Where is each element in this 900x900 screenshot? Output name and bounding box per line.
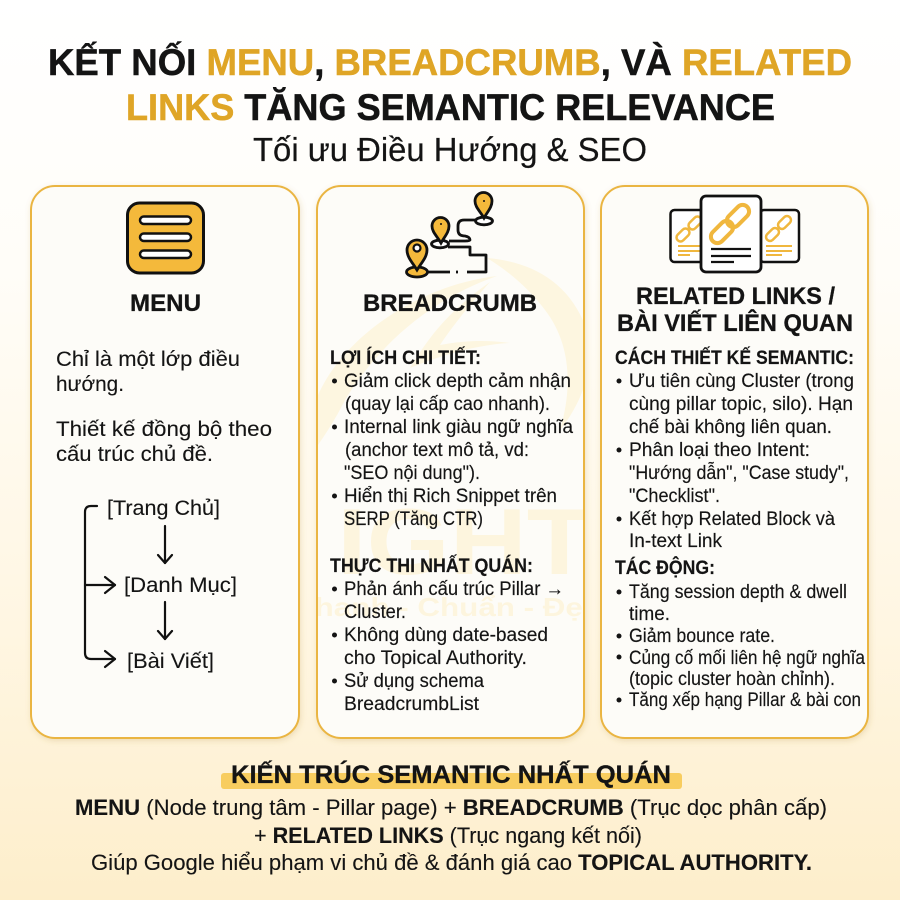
text block: impact: Củng cố mối liên hệ ngữ nghĩa xyxy=(629,648,865,669)
text block: impact: Giảm bounce rate. xyxy=(629,626,775,647)
footer summary text xyxy=(75,795,827,875)
hierarchy diagram: [Danh Mục] xyxy=(124,573,237,597)
text block: impact: Tăng session depth & dwell xyxy=(629,582,847,603)
text block: semantic design: chế bài không liên quan. xyxy=(629,417,832,438)
text block: menu description: hướng. xyxy=(56,372,124,396)
panel: menu xyxy=(31,186,299,738)
subtitle: Tối ưu Điều Hướng & SEO xyxy=(253,131,647,168)
text block: impact: Tăng xếp hạng Pillar & bài con xyxy=(629,690,861,711)
text block: semantic design: Ưu tiên cùng Cluster (trong xyxy=(629,371,854,392)
text block: consistent implementation: cho Topical Authority. xyxy=(344,648,527,669)
icon: breadcrumb route xyxy=(406,192,492,277)
panel: breadcrumb xyxy=(314,184,589,744)
text block: detailed benefits: "SEO nội dung"). xyxy=(344,463,480,484)
text block: consistent implementation: Cluster. xyxy=(344,602,406,623)
text block: detailed benefits: Giảm click depth cảm nhận xyxy=(344,371,571,392)
title: LINKS TĂNG SEMANTIC RELEVANCE xyxy=(126,87,775,128)
icon: menu xyxy=(128,203,204,273)
text block: consistent implementation: THỰC THI NHẤT QUÁN: xyxy=(330,555,533,577)
text block: menu description: Chỉ là một lớp điều xyxy=(56,347,240,371)
text block: detailed benefits: (anchor text mô tả, vd: xyxy=(345,440,529,461)
title: KẾT NỐI MENU, BREADCRUMB, VÀ RELATED xyxy=(48,41,852,83)
watermark: brand text: Nhanh - Chuẩn - Đẹp xyxy=(292,592,602,622)
text block: detailed benefits: Hiển thị Rich Snippet trên xyxy=(344,486,557,507)
text block: menu description: Thiết kế đồng bộ theo xyxy=(56,417,272,441)
text block: semantic design: "Checklist". xyxy=(629,486,720,507)
text block: impact: TÁC ĐỘNG: xyxy=(615,557,715,579)
text block: semantic design: In-text Link xyxy=(629,531,722,552)
footer heading with highlight: KIẾN TRÚC SEMANTIC NHẤT QUÁN xyxy=(231,759,671,789)
watermark: brand text xyxy=(318,508,583,620)
watermark: brand text: IGHT xyxy=(337,489,592,594)
heading: related links: BÀI VIẾT LIÊN QUAN xyxy=(617,309,853,337)
text block: semantic design: CÁCH THIẾT KẾ SEMANTIC: xyxy=(615,347,854,369)
hierarchy diagram xyxy=(85,496,237,673)
text block: semantic design: Phân loại theo Intent: xyxy=(629,440,810,461)
text block: impact: (topic cluster hoàn chỉnh). xyxy=(629,669,835,690)
text block: detailed benefits: (quay lại cấp cao nhanh). xyxy=(345,394,550,415)
text block: impact: time. xyxy=(629,604,670,625)
hierarchy diagram: [Trang Chủ] xyxy=(107,496,220,520)
text block: semantic design: cùng pillar topic, silo). Hạn xyxy=(629,394,853,415)
footer summary text: Giúp Google hiểu phạm vi chủ đề & đánh giá cao TOPICAL AUTHORITY. xyxy=(91,850,812,875)
watermark: swoosh logo xyxy=(318,258,590,445)
title xyxy=(48,41,852,128)
footer summary text: MENU (Node trung tâm - Pillar page) + BREADCRUMB (Trục dọc phân cấp) xyxy=(75,795,827,820)
text block: consistent implementation: Không dùng date-based xyxy=(344,625,548,646)
text block: semantic design: "Hướng dẫn", "Case study", xyxy=(629,462,849,484)
footer summary text: + RELATED LINKS (Trục ngang kết nối) xyxy=(254,823,642,848)
text block: consistent implementation: Sử dụng schema xyxy=(344,671,484,692)
hierarchy diagram: [Bài Viết] xyxy=(127,649,214,673)
text block: semantic design: Kết hợp Related Block và xyxy=(629,509,835,530)
heading: related links: RELATED LINKS / xyxy=(636,283,835,310)
text block: consistent implementation: Phản ánh cấu trúc Pillar → xyxy=(344,579,564,600)
text block: detailed benefits: SERP (Tăng CTR) xyxy=(344,509,483,530)
heading: breadcrumb: BREADCRUMB xyxy=(363,290,537,317)
text block: consistent implementation xyxy=(330,555,564,715)
text block: impact xyxy=(615,557,865,711)
panel: related links xyxy=(601,186,868,738)
heading: menu: MENU xyxy=(130,290,201,317)
text block: semantic design xyxy=(615,347,854,552)
text block: detailed benefits: LỢI ÍCH CHI TIẾT: xyxy=(330,347,481,369)
text block: detailed benefits xyxy=(330,347,573,530)
text block: menu description: cấu trúc chủ đề. xyxy=(56,442,213,466)
text block: menu description xyxy=(56,347,272,466)
heading: related links xyxy=(617,283,853,337)
text block: detailed benefits: Internal link giàu ngữ nghĩa xyxy=(344,417,573,438)
text block: consistent implementation: BreadcrumbList xyxy=(344,694,480,715)
icon: linked documents xyxy=(670,196,799,272)
